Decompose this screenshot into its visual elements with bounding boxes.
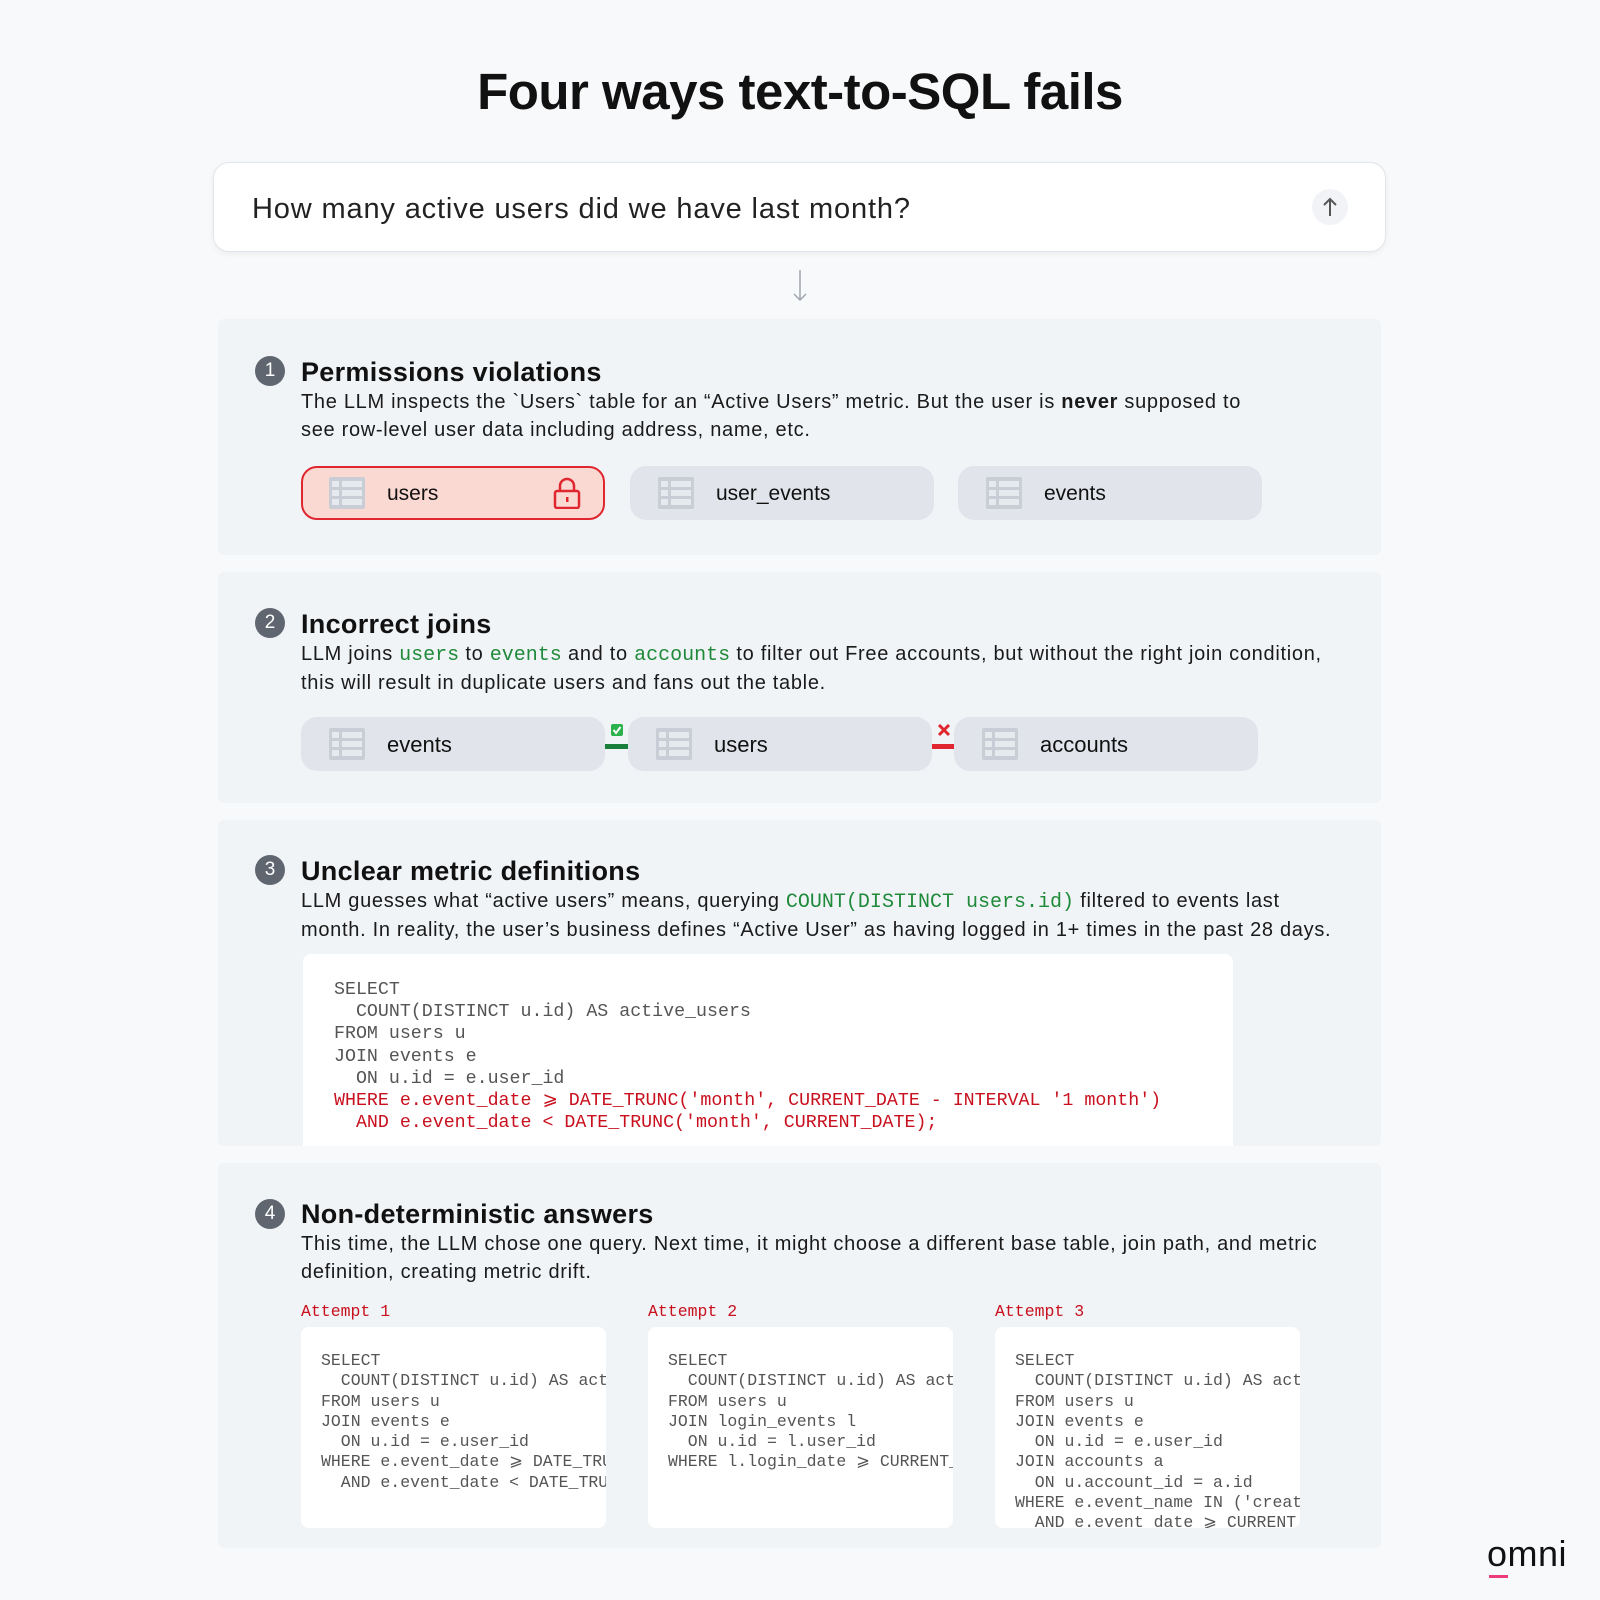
pill: accounts: accounts <box>1040 732 1128 757</box>
text block: The LLM inspects the `Users` table for an “Active Users” metric. But the user is never supposed to <box>301 391 1241 413</box>
attempt 1: Attempt 1 <box>301 1302 390 1321</box>
icon: lock <box>554 478 580 509</box>
panel: incorrect joins <box>218 572 1381 803</box>
question text: How many active users did we have last month? <box>252 193 911 225</box>
logo: omni: omni <box>1487 1533 1567 1574</box>
pill: events: events <box>387 732 452 757</box>
text block <box>301 890 1331 940</box>
number 4 <box>255 1199 285 1229</box>
text block: definition, creating metric drift. <box>301 1260 592 1282</box>
pill: users <box>628 717 932 771</box>
attempt 2: Attempt 2 <box>648 1302 737 1321</box>
heading: Unclear metric definitions <box>301 856 640 886</box>
number 3: 3 <box>265 859 275 880</box>
code block: SELECT COUNT(DISTINCT u.id) AS active_users FROM users u JOIN events e ON u.id = e.user_id WHERE e.event_date ⩾ DATE_TRUNC('month', CURRENT_DATE - INTERVAL '1 month') AND e.event_date < DATE_TRUNC('month', CURRENT_DATE); <box>334 980 1161 1133</box>
number 2 <box>255 608 285 638</box>
text block: month. In reality, the user’s business defines “Active User” as having logged in 1+ times in the past 28 days. <box>301 918 1331 940</box>
heading: Permissions violations <box>301 357 602 387</box>
icon: send arrow <box>1312 189 1348 225</box>
attempt 2 <box>648 1302 953 1528</box>
panel: permissions violations <box>218 319 1381 555</box>
connector: invalid join <box>932 724 954 749</box>
panel: unclear metric definitions <box>218 820 1381 1146</box>
text block: this will result in duplicate users and fans out the table. <box>301 672 826 694</box>
number 1: 1 <box>265 360 275 381</box>
number 3 <box>255 855 285 885</box>
attempt 3: Attempt 3 <box>995 1302 1084 1321</box>
code block <box>303 954 1233 1174</box>
text block: LLM guesses what “active users” means, querying COUNT(DISTINCT users.id) filtered to events last <box>301 890 1280 914</box>
text block: LLM joins users to events and to accounts to filter out Free accounts, but without the right join condition, <box>301 643 1322 667</box>
pill: users locked <box>301 466 605 520</box>
connector: valid join <box>605 724 628 749</box>
text block: see row-level user data including address, name, etc. <box>301 418 811 440</box>
pill: events <box>958 466 1262 520</box>
pill: user_events: user_events <box>716 482 830 505</box>
number 1 <box>255 356 285 386</box>
pill: accounts <box>954 717 1258 771</box>
title: Four ways text-to-SQL fails <box>477 63 1123 120</box>
pill: users: users <box>714 732 768 757</box>
number 2: 2 <box>265 612 275 633</box>
pill: users locked: users <box>387 482 438 505</box>
text block <box>301 391 1241 440</box>
panel: non-deterministic answers <box>218 1163 1381 1548</box>
arrow down <box>794 270 806 301</box>
attempt 1 <box>301 1302 606 1528</box>
pill: events <box>301 717 605 771</box>
heading: Non-deterministic answers <box>301 1199 654 1229</box>
pill: events: events <box>1044 482 1106 505</box>
number 4: 4 <box>265 1203 275 1224</box>
text block: This time, the LLM chose one query. Next time, it might choose a different base table, join path, and metric <box>301 1233 1317 1255</box>
pill: user_events <box>630 466 934 520</box>
input box <box>213 162 1386 252</box>
text block <box>301 1233 1317 1282</box>
text block <box>301 643 1322 694</box>
heading: Incorrect joins <box>301 609 492 639</box>
